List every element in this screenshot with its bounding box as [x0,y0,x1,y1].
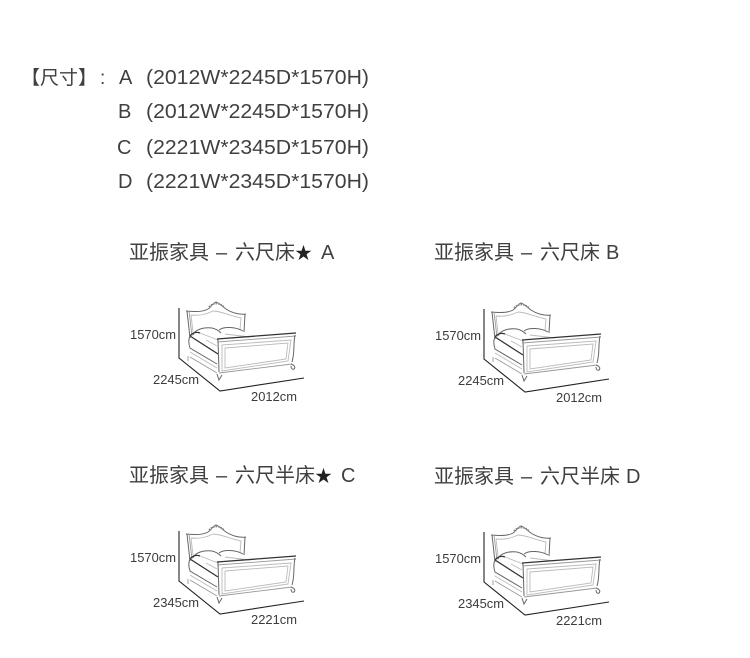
bed illustration A [179,302,304,391]
heading B: B [606,242,619,264]
dimension: height D: 1570cm [435,552,481,566]
panel: bed A [129,241,335,404]
size line A: (2012W*2245D*1570H) [146,67,369,89]
heading D [434,465,640,488]
dimension: height A: 1570cm [130,328,176,342]
heading A: ★ [295,244,312,263]
size line C: C [117,137,131,159]
size specification list [21,67,369,193]
bed illustration C [179,525,304,614]
dimension: height B: 1570cm [435,329,481,343]
panel: bed B [434,241,619,405]
size label: 【尺寸】 [21,67,97,89]
heading B [434,241,619,264]
size line D: D [118,171,132,193]
dimension: depth C: 2345cm [153,596,199,610]
heading B: – [521,242,533,264]
heading A: A [321,242,335,264]
heading B: 六尺床 [540,241,600,264]
heading D: 亚振家具 [434,465,514,488]
size line C: (2221W*2345D*1570H) [146,137,369,159]
heading A: – [216,242,228,264]
bed illustration B [484,303,609,392]
dimension: width A: 2012cm [251,390,297,404]
panel: bed C [129,464,355,627]
dimension: depth A: 2245cm [153,373,199,387]
size line B: B [118,101,131,123]
heading C: 亚振家具 [129,464,209,487]
dimension: width D: 2221cm [556,614,602,628]
dimension: width B: 2012cm [556,391,602,405]
heading C: C [341,465,355,487]
heading B: 亚振家具 [434,241,514,264]
size line A: A [119,67,133,89]
bed illustration D [484,526,609,615]
heading C: ★ [315,467,332,486]
size line D: (2221W*2345D*1570H) [146,171,369,193]
dimension: width C: 2221cm [251,613,297,627]
heading C: 六尺半床 [235,464,315,487]
heading C [129,464,355,487]
size line B: (2012W*2245D*1570H) [146,101,369,123]
dimension: depth D: 2345cm [458,597,504,611]
size label colon: : [100,68,105,89]
heading A [129,241,335,264]
heading C: – [216,465,228,487]
heading A: 亚振家具 [129,241,209,264]
heading D: D [626,466,640,488]
heading D: – [521,466,533,488]
dimension: depth B: 2245cm [458,374,504,388]
panel: bed D [434,465,640,628]
heading A: 六尺床 [235,241,295,264]
dimension: height C: 1570cm [130,551,176,565]
heading D: 六尺半床 [540,465,620,488]
